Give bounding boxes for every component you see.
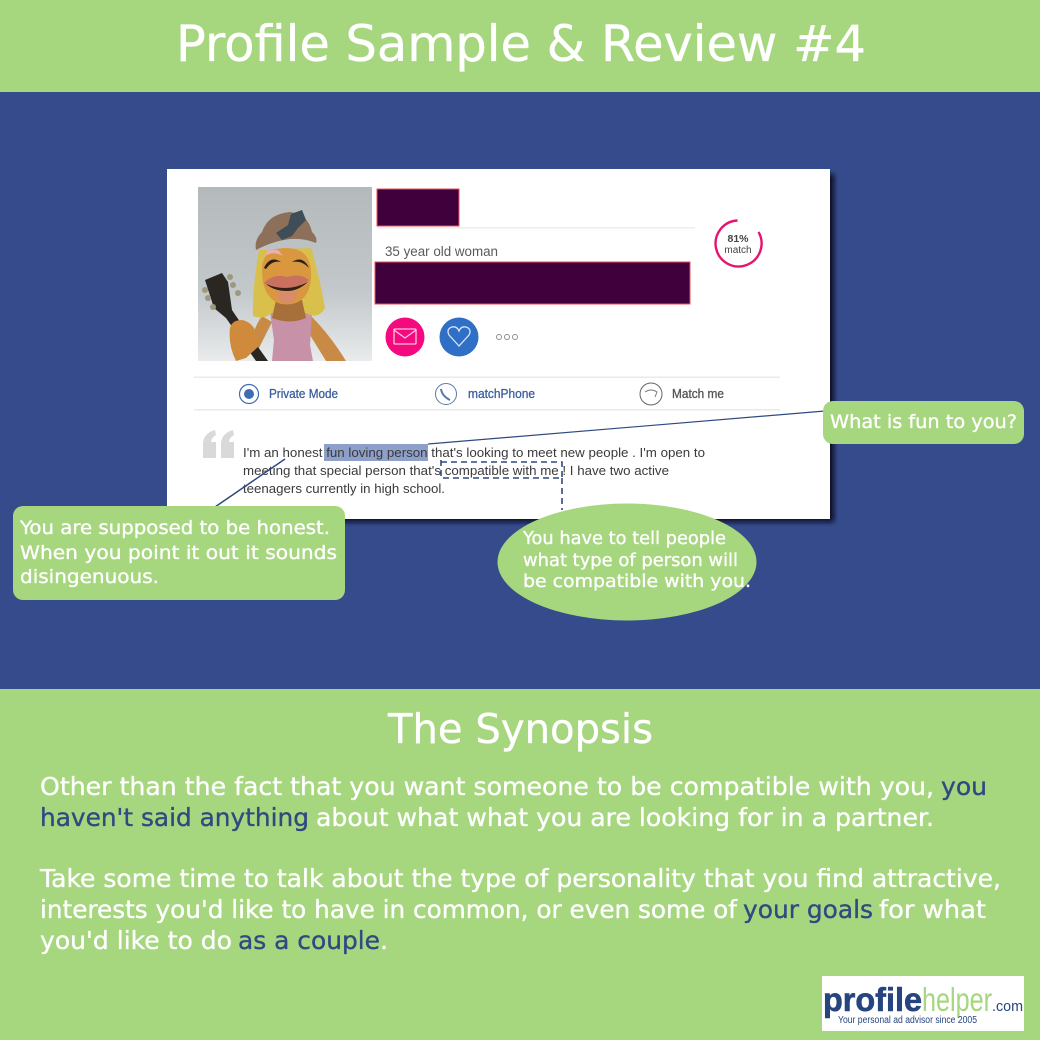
arrow: honest callout line [215, 459, 285, 507]
callout: compatible ellipse: You have to tell people [522, 528, 726, 549]
profile essay text: meeting that special person that's compatible with me ! I have two active [243, 463, 669, 478]
synopsis paragraph two: your goals [743, 895, 873, 924]
action: matchPhone [436, 384, 535, 404]
synopsis heading: The Synopsis [387, 705, 653, 753]
action: private mode [240, 384, 338, 404]
arrow: fun callout line [428, 411, 825, 444]
synopsis paragraph one: haven't said anything [40, 803, 309, 832]
synopsis paragraph two: . [380, 926, 388, 955]
arrow: compatible dashed box and connector [441, 460, 562, 510]
synopsis paragraph one [40, 772, 987, 832]
title: Profile Sample & Review #4 [176, 15, 866, 73]
age text: 35 year old woman [385, 244, 498, 259]
action: match me [640, 383, 724, 405]
logo: profilehelper.com: helper [922, 981, 992, 1018]
synopsis paragraph two [39, 864, 1001, 955]
logo: profilehelper.com: Your personal ad advisor since 2005 [838, 1015, 977, 1026]
match ring: 81% [727, 233, 749, 245]
match ring: match [724, 245, 752, 256]
logo: profilehelper.com [822, 976, 1024, 1031]
callout: honest: You are supposed to be honest. [19, 517, 330, 539]
icon: heart button [440, 318, 478, 356]
callout: honest: disingenuous. [20, 566, 159, 588]
callout: what is fun: What is fun to you? [830, 411, 1017, 433]
callout: what is fun [823, 401, 1024, 444]
callout: compatible ellipse [498, 504, 756, 620]
synopsis paragraph two: interests you'd like to have in common, or even some of [40, 895, 738, 924]
redacted details block [375, 262, 690, 304]
logo: profilehelper.com: profile [823, 981, 922, 1018]
synopsis paragraph two: you'd like to do [40, 926, 232, 955]
profile essay text: teenagers currently in high school. [243, 481, 445, 496]
icon: quotation mark [203, 430, 234, 458]
profile essay text [243, 445, 705, 496]
profile essay text: I'm an honest fun loving person that's looking to meet new people . I'm open to [243, 445, 705, 460]
icon: more dots [496, 334, 518, 340]
synopsis paragraph one: you [941, 772, 987, 801]
callout: compatible ellipse: be compatible with you. [523, 571, 751, 592]
header band [0, 0, 1040, 92]
synopsis paragraph two: as a couple [238, 926, 380, 955]
synopsis paragraph two: Take some time to talk about the type of personality that you find attractive, [39, 864, 1001, 893]
logo: profilehelper.com: .com [992, 998, 1023, 1015]
action: matchPhone: matchPhone [468, 387, 535, 401]
synopsis paragraph two: for what [879, 895, 986, 924]
highlighted phrase [324, 444, 428, 461]
action: private mode: Private Mode [269, 387, 338, 401]
panel: synopsis [0, 689, 1040, 1040]
icon: message button [386, 318, 424, 356]
profile photo: muppet with guitar [198, 187, 372, 361]
panel: dating profile card [167, 169, 834, 522]
action: match me: Match me [672, 387, 724, 401]
callout: honest [13, 506, 345, 600]
redacted name block [377, 189, 459, 226]
synopsis paragraph one: Other than the fact that you want someone to be compatible with you, [40, 772, 934, 801]
match ring [716, 220, 762, 266]
synopsis paragraph one: about what what you are looking for in a partner. [316, 803, 934, 832]
callout: compatible ellipse: what type of person will [523, 550, 738, 571]
callout: honest: When you point it out it sounds [20, 542, 337, 564]
